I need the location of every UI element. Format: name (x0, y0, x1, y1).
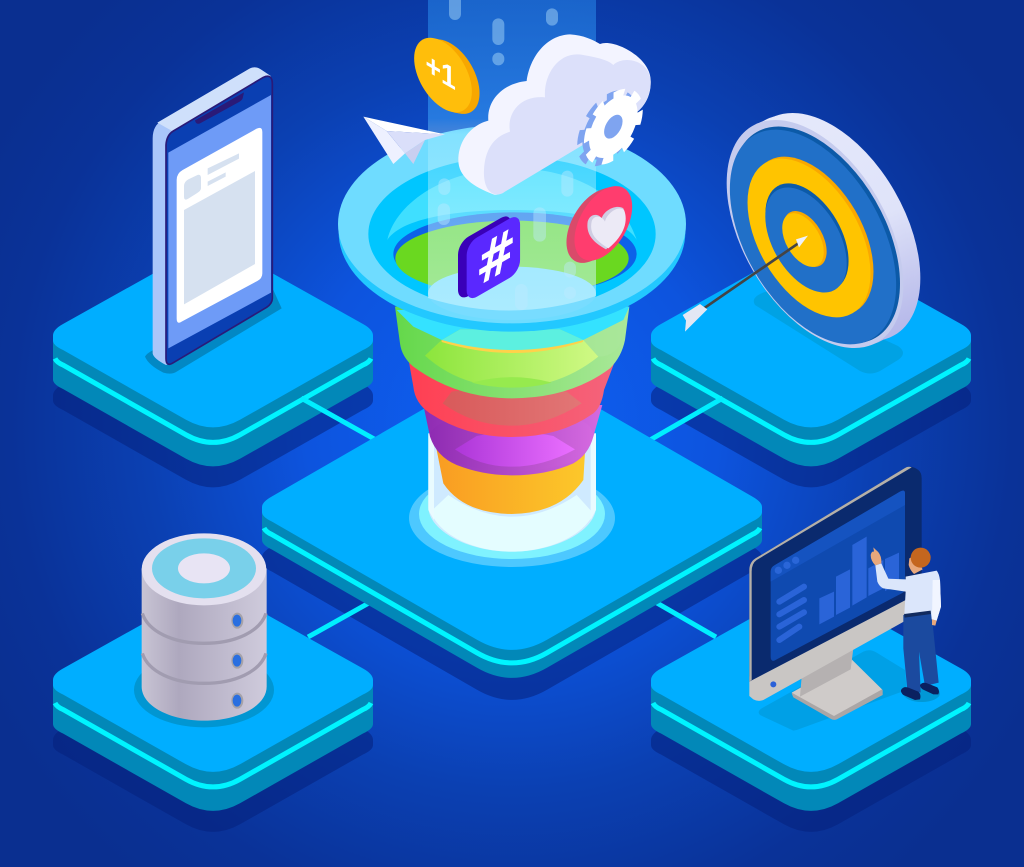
icon: cloud (458, 34, 651, 195)
person hand (871, 547, 881, 565)
orange layer (436, 447, 585, 514)
phone screen (166, 76, 272, 364)
upper connector lines (301, 398, 723, 440)
phone avatar (184, 175, 201, 200)
phone post card (177, 128, 262, 323)
database lights (231, 613, 243, 709)
icon: paper plane (363, 117, 445, 164)
database shadow (134, 653, 274, 727)
icon: gear (580, 81, 640, 174)
person head (909, 555, 923, 574)
monitor stand (792, 660, 883, 720)
funnel water (428, 267, 596, 320)
monitor text lines (779, 587, 804, 640)
phone image area (184, 171, 255, 304)
funnel rim (338, 125, 686, 332)
icon: plus one coin: +1 (426, 46, 456, 97)
platform: target (651, 248, 971, 466)
target rim (732, 74, 920, 385)
monitor shadow (759, 650, 907, 731)
person legs (903, 611, 939, 693)
database top (142, 533, 266, 605)
platform: phone (53, 248, 373, 466)
red inner lens (443, 386, 582, 426)
phone notch (195, 92, 244, 124)
monitor screen (771, 491, 905, 661)
icon: heart badge (566, 173, 632, 276)
lower connector lines (308, 599, 716, 637)
phone shadow (145, 290, 282, 374)
purple inner lens (455, 432, 575, 467)
monitor button (770, 681, 776, 687)
red layer (408, 358, 616, 437)
database (134, 533, 274, 727)
target rings (732, 90, 900, 380)
person shoes (901, 687, 921, 700)
platform: centre (262, 368, 762, 678)
target shadow (754, 290, 903, 374)
target (683, 74, 920, 387)
monitor window dots (775, 557, 799, 574)
phone body edge (153, 67, 272, 365)
icon: plus one coin (414, 25, 480, 127)
arrow (683, 236, 808, 332)
green inner lens (425, 340, 598, 387)
floating icons (363, 25, 651, 303)
monitor frame (749, 467, 922, 682)
platform shadows (53, 308, 971, 832)
data dashes (438, 0, 576, 310)
icon: hashtag tile (458, 212, 520, 303)
funnel (338, 125, 686, 567)
phone text lines (208, 153, 239, 186)
person arm shade (932, 580, 941, 621)
database body (142, 568, 267, 721)
person shadow (903, 685, 940, 702)
platform: database (53, 592, 373, 811)
light beam (428, 0, 596, 311)
person belt (904, 612, 931, 616)
person shirt (875, 563, 941, 621)
green layer (395, 307, 629, 398)
funnel inner wall (368, 157, 656, 311)
funnel base glow (409, 469, 615, 567)
platform: monitor (651, 592, 971, 811)
purple layer (423, 405, 602, 475)
icon: hashtag tile: # (476, 213, 516, 301)
phone (145, 67, 282, 374)
person (871, 547, 941, 702)
cyan band under rim (397, 307, 629, 340)
database grooves (142, 613, 266, 683)
monitor bar chart (819, 537, 899, 624)
monitor chin (749, 587, 922, 701)
monitor (749, 467, 941, 731)
funnel hole (393, 212, 637, 296)
funnel glass cylinder (395, 307, 629, 552)
phone blue area (168, 95, 271, 348)
